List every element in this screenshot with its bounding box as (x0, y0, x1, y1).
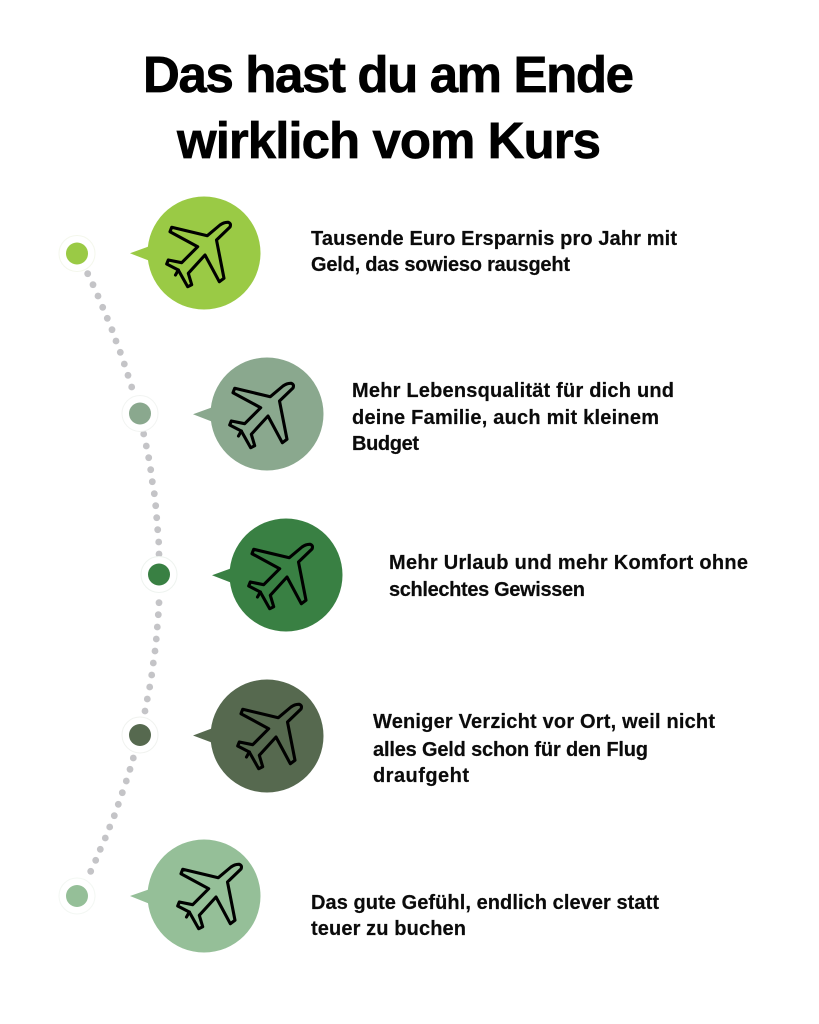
text: item 1: Geld, das sowieso rausgeht (311, 254, 570, 276)
speech bubble 4 (193, 680, 324, 792)
text: item 3: schlechtes Gewissen (389, 579, 585, 601)
text: item 4: alles Geld schon für den Flug (373, 739, 648, 761)
text: item 2 (352, 380, 674, 455)
icon: airplane 3 (249, 544, 312, 609)
text: item 3: Mehr Urlaub und mehr Komfort ohne (389, 552, 748, 574)
item 2: quality of life (122, 358, 674, 470)
title: wirklich vom Kurs (176, 112, 601, 169)
text: item 3 (389, 552, 748, 601)
item 3: vacation and comfort (141, 518, 748, 632)
speech bubble 1 (130, 196, 260, 310)
icon: airplane 5 (178, 864, 241, 929)
text: item 5 (311, 892, 659, 940)
item 4: less sacrifice (122, 680, 715, 792)
speech bubble 3 (212, 518, 342, 632)
dotted timeline path (84, 270, 162, 875)
speech bubble 2 (193, 358, 324, 470)
text: item 2: Budget (352, 433, 419, 455)
timeline node 1 (59, 236, 95, 272)
icon: airplane 4 (238, 704, 301, 769)
text: item 1: Tausende Euro Ersparnis pro Jahr mit (311, 228, 677, 250)
item 5: smart booking (59, 840, 659, 952)
text: item 4: draufgeht (373, 765, 469, 787)
speech bubble 5 (130, 840, 260, 952)
title (143, 46, 634, 169)
text: item 4 (373, 711, 715, 787)
timeline node 3 (141, 556, 177, 592)
text: item 2: deine Familie, auch mit kleinem (352, 407, 659, 429)
text: item 1 (311, 228, 677, 276)
item 1: savings (59, 196, 677, 310)
title: Das hast du am Ende (143, 46, 634, 103)
timeline node 5 (59, 878, 95, 914)
text: item 5: Das gute Gefühl, endlich clever statt (311, 892, 659, 914)
timeline node 4 (122, 717, 158, 753)
timeline node 2 (122, 396, 158, 432)
text: item 2: Mehr Lebensqualität für dich und (352, 380, 674, 402)
icon: airplane 2 (230, 383, 293, 448)
text: item 5: teuer zu buchen (311, 918, 466, 940)
text: item 4: Weniger Verzicht vor Ort, weil nicht (373, 711, 715, 733)
icon: airplane 1 (167, 222, 230, 287)
